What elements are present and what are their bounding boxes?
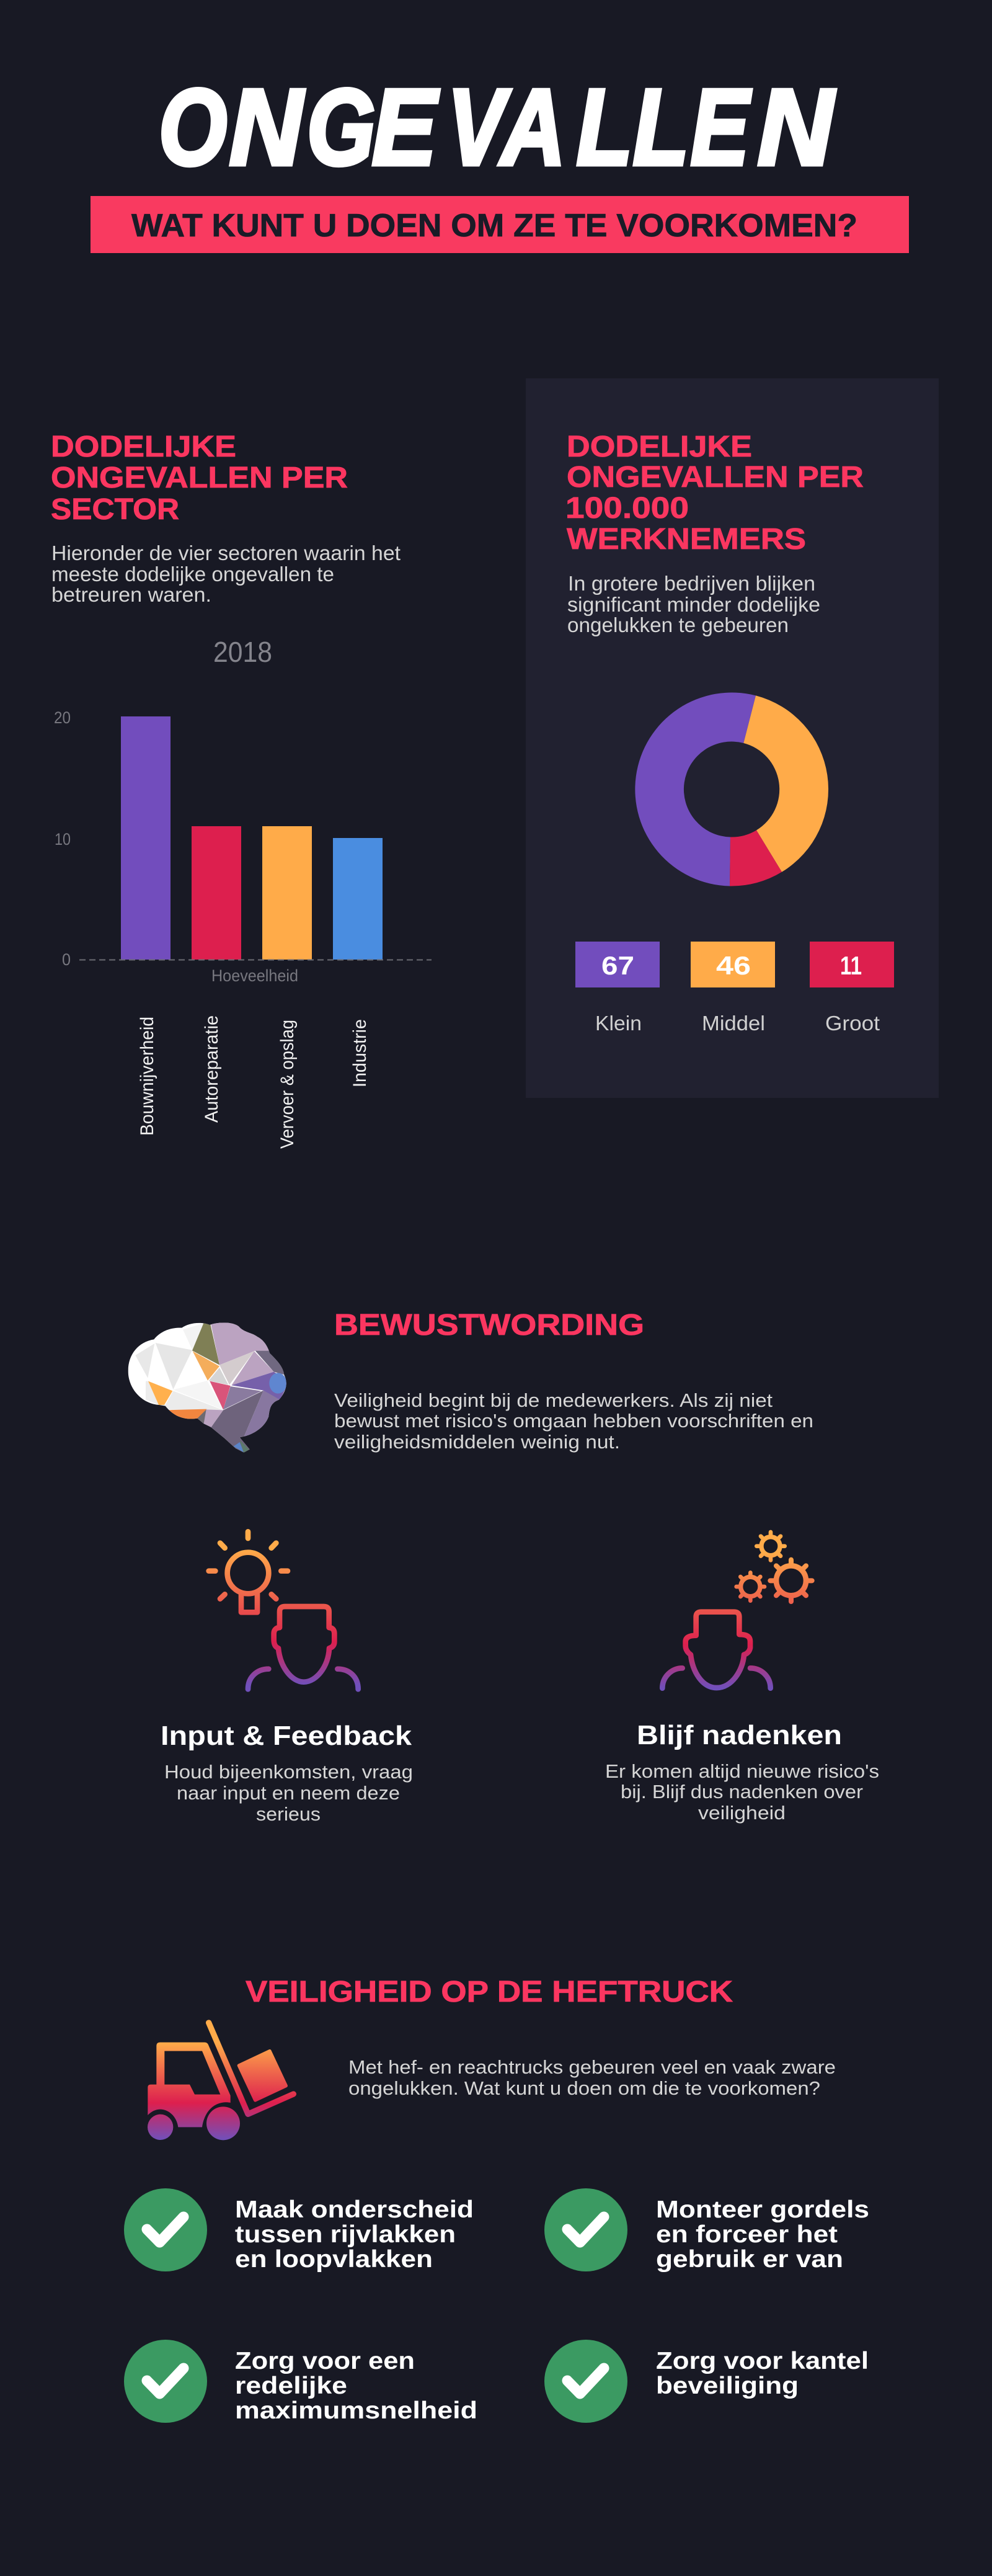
tip: gordels: en forceer het xyxy=(656,2221,838,2248)
y axis labels: 20 xyxy=(54,708,71,727)
title: E xyxy=(372,66,439,187)
section: bewustwording xyxy=(334,1309,813,1453)
panel: dodelijke ongevallen per sector xyxy=(51,430,432,1149)
title: O xyxy=(159,66,227,187)
heading: per 100.000 werknemers: 100.000 xyxy=(565,492,689,525)
heading: per 100.000 werknemers xyxy=(565,430,864,556)
text block: sector intro xyxy=(51,541,401,606)
feature: blijf nadenken xyxy=(605,1720,879,1824)
tip: maximumsnelheid: Zorg voor een xyxy=(235,2348,415,2374)
icon: person with gears xyxy=(662,1532,812,1688)
text block: sector intro: Hieronder de vier sectoren waarin het xyxy=(51,541,401,564)
category labels xyxy=(137,1015,370,1149)
subtitle banner: WAT KUNT U DOEN OM ZE TE VOORKOMEN? xyxy=(131,208,857,244)
text block: sector intro: betreuren waren. xyxy=(51,583,211,606)
donut chart xyxy=(635,693,828,886)
feature: input en feedback: serieus xyxy=(256,1803,321,1825)
heading: per sector: SECTOR xyxy=(51,493,179,526)
title: A xyxy=(499,66,565,187)
bar chart xyxy=(54,636,432,1149)
tip: rijvlakken xyxy=(124,2188,474,2273)
feature: input en feedback xyxy=(161,1721,413,1825)
text block: donut intro: In grotere bedrijven blijken xyxy=(568,572,815,595)
category labels: Bouwnijverheid xyxy=(137,1017,157,1136)
legend: groot xyxy=(810,942,894,1035)
feature: blijf nadenken: Blijf nadenken xyxy=(637,1720,842,1750)
tip: rijvlakken: Maak onderscheid xyxy=(235,2196,474,2223)
text block: bewustwording: bewust met risico's omgaan hebben voorschriften en xyxy=(334,1410,813,1432)
legend: klein xyxy=(575,942,660,1035)
feature: input en feedback: Houd bijeenkomsten, vraag xyxy=(164,1761,413,1783)
feature: input en feedback: naar input en neem deze xyxy=(177,1782,400,1804)
heading: per sector: DODELIJKE xyxy=(51,430,236,463)
category labels: Autoreparatie xyxy=(202,1015,222,1123)
heading: veiligheid op de heftruck: VEILIGHEID OP DE HEFTRUCK xyxy=(246,1976,733,2008)
tip: gordels: Monteer gordels xyxy=(656,2196,869,2223)
heading: bewustwording: BEWUSTWORDING xyxy=(334,1309,644,1342)
text block: bewustwording: veiligheidsmiddelen weinig nut. xyxy=(334,1431,620,1453)
title: L xyxy=(633,66,689,187)
icon: person with lightbulb xyxy=(209,1531,358,1689)
title: G xyxy=(307,66,375,187)
legend: middel: 46 xyxy=(716,951,751,980)
title: E xyxy=(691,66,751,187)
title: N xyxy=(758,66,835,187)
text block: donut intro: ongelukken te gebeuren xyxy=(567,613,789,636)
tip: maximumsnelheid: redelijke xyxy=(235,2373,347,2399)
feature: blijf nadenken: veiligheid xyxy=(698,1802,786,1824)
panel: dodelijke ongevallen per 100.000 werknemers xyxy=(526,378,939,1098)
text block: donut intro: significant minder dodelijke xyxy=(567,593,820,616)
text block: donut intro xyxy=(567,572,820,636)
heading: per 100.000 werknemers: WERKNEMERS xyxy=(567,523,806,556)
tip: maximumsnelheid xyxy=(124,2340,477,2424)
text block: heftruck intro: Met hef- en reachtrucks gebeuren veel en vaak zware xyxy=(348,2056,836,2078)
heading: per 100.000 werknemers: DODELIJKE xyxy=(567,430,752,463)
feature: input en feedback: Input & Feedback xyxy=(161,1721,412,1751)
text block: heftruck intro xyxy=(348,2056,836,2099)
legend: groot: Groot xyxy=(825,1012,880,1035)
title: V xyxy=(448,66,511,187)
x axis title: Hoeveelheid xyxy=(211,966,298,985)
y axis labels: 10 xyxy=(55,830,71,849)
legend: klein: 67 xyxy=(601,951,634,980)
legend: middel: Middel xyxy=(702,1012,765,1035)
title: N xyxy=(229,66,304,187)
legend: groot: 11 xyxy=(840,951,862,980)
feature: blijf nadenken: bij. Blijf dus nadenken over xyxy=(621,1781,863,1803)
heading: per 100.000 werknemers: ONGEVALLEN PER xyxy=(567,461,864,494)
tip: maximumsnelheid: maximumsnelheid xyxy=(235,2397,477,2424)
title: L xyxy=(577,66,632,187)
category labels: Industrie xyxy=(350,1019,370,1087)
tip: kantel beveiliging: Zorg voor kantel xyxy=(656,2348,869,2374)
icon: check xyxy=(544,2188,627,2271)
y axis labels xyxy=(54,708,71,969)
text block: bewustwording: Veiligheid begint bij de medewerkers. Als zij niet xyxy=(334,1389,773,1411)
tip: kantel beveiliging xyxy=(544,2340,869,2423)
text block: heftruck intro: ongelukken. Wat kunt u doen om die te voorkomen? xyxy=(348,2077,820,2099)
icon: check xyxy=(124,2188,207,2271)
category labels: Vervoer & opslag xyxy=(277,1020,298,1149)
icon: forklift xyxy=(148,2023,293,2140)
title xyxy=(159,66,835,187)
icon: check xyxy=(124,2340,207,2423)
tip: gordels: gebruik er van xyxy=(656,2246,843,2273)
heading: per sector xyxy=(51,430,348,526)
bars xyxy=(121,716,383,960)
tip: rijvlakken: tussen rijvlakken xyxy=(235,2221,456,2248)
subtitle banner xyxy=(91,196,909,253)
y axis labels: 0 xyxy=(62,950,71,969)
chart title: 2018 xyxy=(213,636,272,668)
legend: middel xyxy=(691,942,775,1035)
icon: polygon brain xyxy=(124,1319,290,1456)
tip: gordels xyxy=(544,2188,869,2273)
heading: per sector: ONGEVALLEN PER xyxy=(51,461,348,494)
feature: blijf nadenken: Er komen altijd nieuwe risico's xyxy=(605,1760,879,1782)
icon: check xyxy=(544,2340,627,2423)
tip: kantel beveiliging: beveiliging xyxy=(656,2373,799,2399)
text block: bewustwording xyxy=(334,1389,813,1453)
tip: rijvlakken: en loopvlakken xyxy=(235,2246,433,2273)
legend: klein: Klein xyxy=(595,1012,642,1035)
text block: sector intro: meeste dodelijke ongevallen te xyxy=(51,563,334,586)
